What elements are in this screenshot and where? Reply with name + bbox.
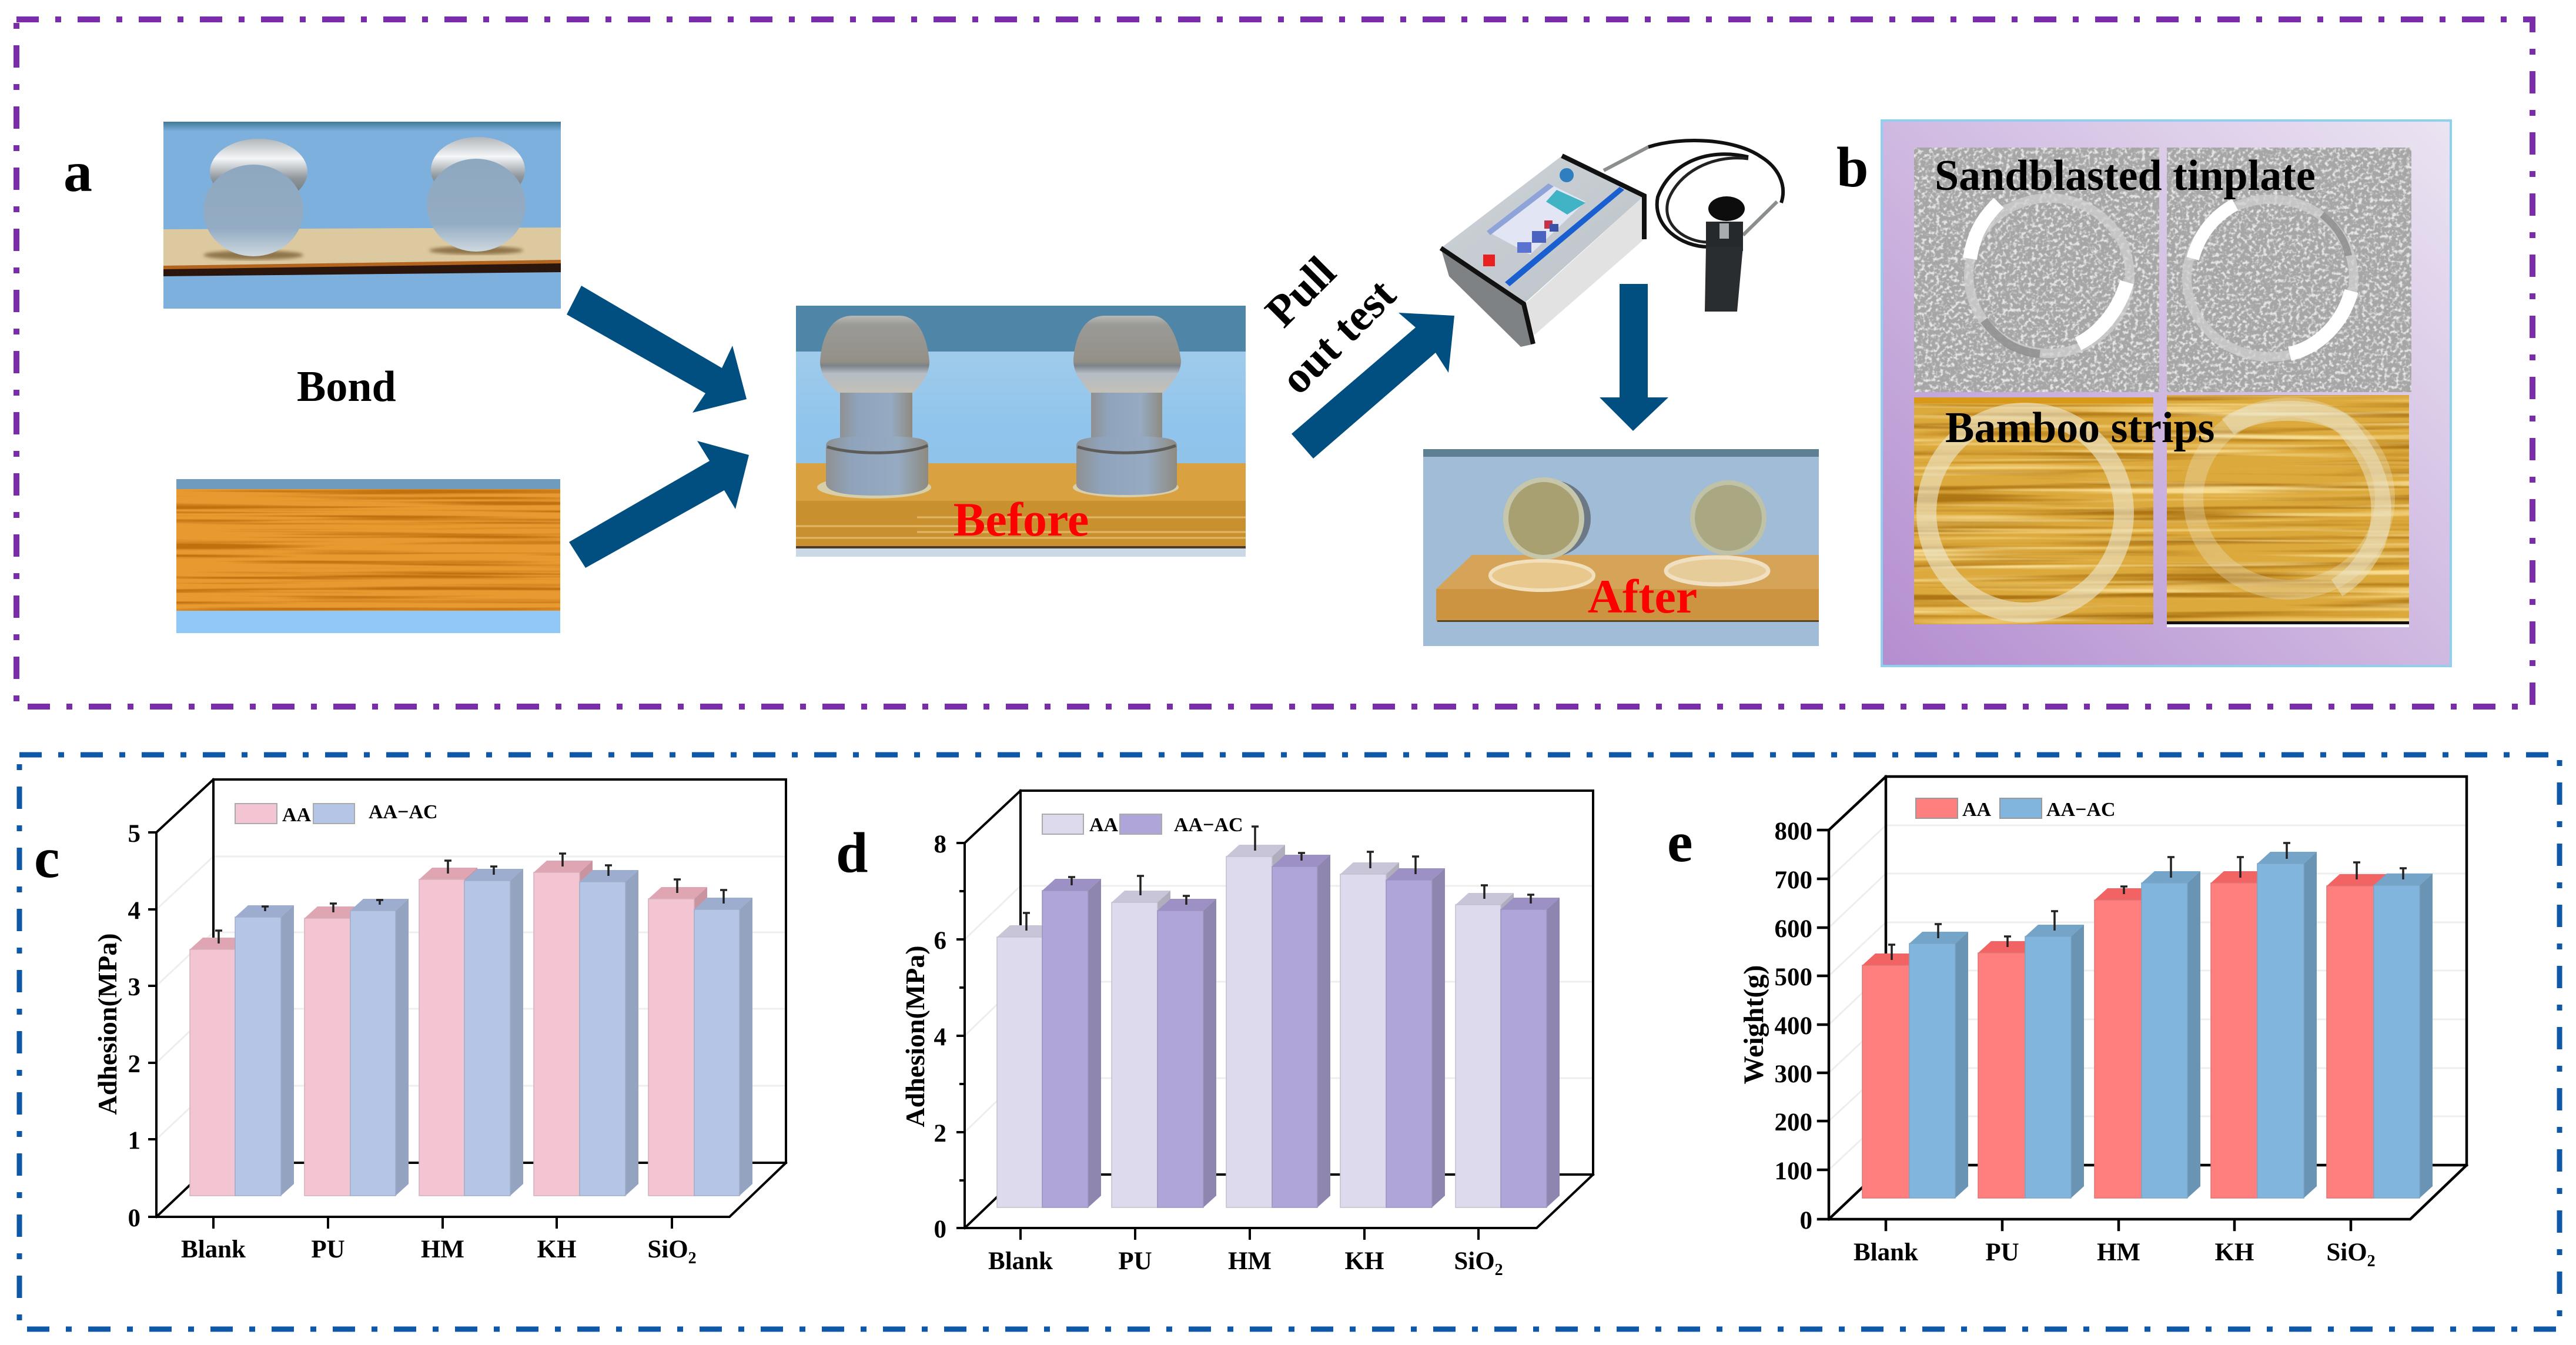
panel letter c: c	[34, 827, 60, 890]
axes frame	[149, 779, 786, 1227]
x category labels: Blank	[1854, 1239, 1918, 1266]
grid lines	[965, 886, 1593, 1132]
x category labels: KH	[1345, 1247, 1384, 1275]
legend	[235, 801, 438, 826]
y tick labels: 0	[934, 1216, 946, 1243]
y tick labels: 5	[128, 820, 140, 848]
legend: AA−AC	[1174, 814, 1243, 836]
legend: AA	[1089, 814, 1119, 836]
x category labels: KH	[537, 1236, 576, 1263]
bars: PU	[1978, 911, 2084, 1198]
text: Pull: Pull	[1256, 247, 1345, 336]
photo: bamboo right	[2167, 395, 2409, 627]
y tick labels: 4	[934, 1023, 946, 1051]
x category labels: 2	[688, 1249, 697, 1267]
legend	[1042, 814, 1243, 836]
panel a and b border	[16, 19, 2532, 707]
x category labels: PU	[1118, 1247, 1152, 1275]
y tick labels	[934, 831, 946, 1243]
x category labels: 2	[2367, 1252, 2376, 1270]
bars: PU	[305, 899, 409, 1196]
legend: AA	[1962, 799, 1992, 821]
bars: KH	[534, 854, 638, 1196]
y tick labels: 200	[1774, 1109, 1812, 1136]
legend: AA−AC	[369, 801, 438, 823]
panel a	[63, 122, 1819, 646]
x category labels	[181, 1236, 697, 1267]
photo: after test	[1423, 449, 1819, 646]
photo: bamboo left	[1914, 397, 2153, 624]
legend	[1916, 798, 2116, 821]
chart c	[34, 779, 786, 1267]
photo: bamboo strip	[176, 479, 560, 633]
bars: PU	[1112, 876, 1216, 1207]
x category labels: HM	[1228, 1247, 1272, 1275]
y tick labels: 2	[128, 1050, 140, 1078]
chart e	[1667, 777, 2467, 1270]
arrow: bamboo to assembly	[569, 441, 749, 568]
panel letter e: e	[1667, 811, 1693, 874]
photo: tinplate right	[2167, 148, 2411, 392]
arrow: tester to after result	[1600, 284, 1668, 431]
grid lines	[1829, 825, 2467, 1170]
legend: AA	[282, 804, 312, 826]
y tick labels: 600	[1774, 915, 1812, 943]
axes frame	[958, 791, 1593, 1239]
y tick labels	[1774, 818, 1812, 1234]
x category labels	[1854, 1239, 2376, 1270]
y tick labels: 2	[934, 1120, 946, 1147]
y axis title: Weight(g)	[1738, 965, 1769, 1084]
y tick labels: 400	[1774, 1012, 1812, 1040]
x category labels: PU	[311, 1236, 345, 1263]
y tick labels: 100	[1774, 1157, 1812, 1185]
arrow: to pull-out tester	[1292, 313, 1454, 459]
panel background	[1882, 121, 2451, 666]
x category labels: SiO	[1454, 1247, 1495, 1275]
charts border	[19, 755, 2560, 1329]
text: Bamboo strips: Bamboo strips	[1945, 404, 2214, 452]
photo: tinplate left	[1914, 148, 2159, 392]
legend: AA−AC	[2046, 799, 2116, 821]
bars: Blank	[190, 905, 294, 1196]
grid lines	[156, 856, 786, 1139]
text: Before: Before	[954, 493, 1089, 546]
panel letter a: a	[63, 140, 92, 204]
text: Sandblasted tinplate: Sandblasted tinplate	[1935, 152, 2316, 200]
text: After: After	[1588, 570, 1697, 623]
bars: KH	[1340, 852, 1445, 1207]
y tick labels: 0	[128, 1205, 140, 1232]
text: Bond: Bond	[297, 363, 396, 411]
y tick labels: 4	[128, 897, 140, 925]
y tick labels: 6	[934, 927, 946, 955]
bars: SiO2	[1456, 885, 1560, 1207]
bars: KH	[2211, 843, 2317, 1198]
bars: HM	[2095, 857, 2200, 1198]
y tick labels: 300	[1774, 1060, 1812, 1088]
y axis title: Adhesion(MPa)	[92, 933, 122, 1115]
bars: HM	[1226, 827, 1330, 1207]
bars: SiO2	[648, 879, 752, 1196]
y tick labels: 800	[1774, 818, 1812, 845]
x category labels	[988, 1247, 1503, 1279]
panel letter d: d	[836, 821, 868, 885]
panel b letter: b	[1836, 136, 1869, 199]
y tick labels: 8	[934, 831, 946, 858]
x category labels: SiO	[647, 1236, 688, 1263]
bars: HM	[419, 861, 523, 1196]
icon: pull-off adhesion tester	[1441, 140, 1783, 347]
x category labels: PU	[1985, 1239, 2019, 1266]
bars: SiO2	[2327, 862, 2433, 1198]
panel b	[1882, 121, 2451, 666]
y tick labels: 1	[128, 1127, 140, 1155]
y tick labels: 500	[1774, 963, 1812, 991]
x category labels: HM	[421, 1236, 464, 1263]
y tick labels: 0	[1800, 1207, 1812, 1234]
bars: Blank	[1862, 924, 1968, 1198]
axes frame	[1818, 777, 2467, 1230]
y tick labels: 700	[1774, 866, 1812, 894]
chart d	[836, 791, 1593, 1279]
x category labels: Blank	[181, 1236, 246, 1263]
x category labels: HM	[2097, 1239, 2140, 1266]
x category labels: 2	[1495, 1261, 1503, 1279]
x category labels: Blank	[988, 1247, 1053, 1275]
text: out test: out test	[1271, 269, 1405, 403]
y tick labels	[128, 820, 140, 1232]
y axis title: Adhesion(MPa)	[900, 945, 930, 1127]
photo: before test	[796, 306, 1246, 557]
arrow: dollies to assembly	[567, 286, 747, 413]
y tick labels: 3	[128, 973, 140, 1001]
bars: Blank	[997, 877, 1101, 1207]
x category labels: KH	[2215, 1239, 2254, 1266]
x category labels: SiO	[2326, 1239, 2367, 1266]
photo: metal dollies on tinplate	[163, 122, 561, 309]
